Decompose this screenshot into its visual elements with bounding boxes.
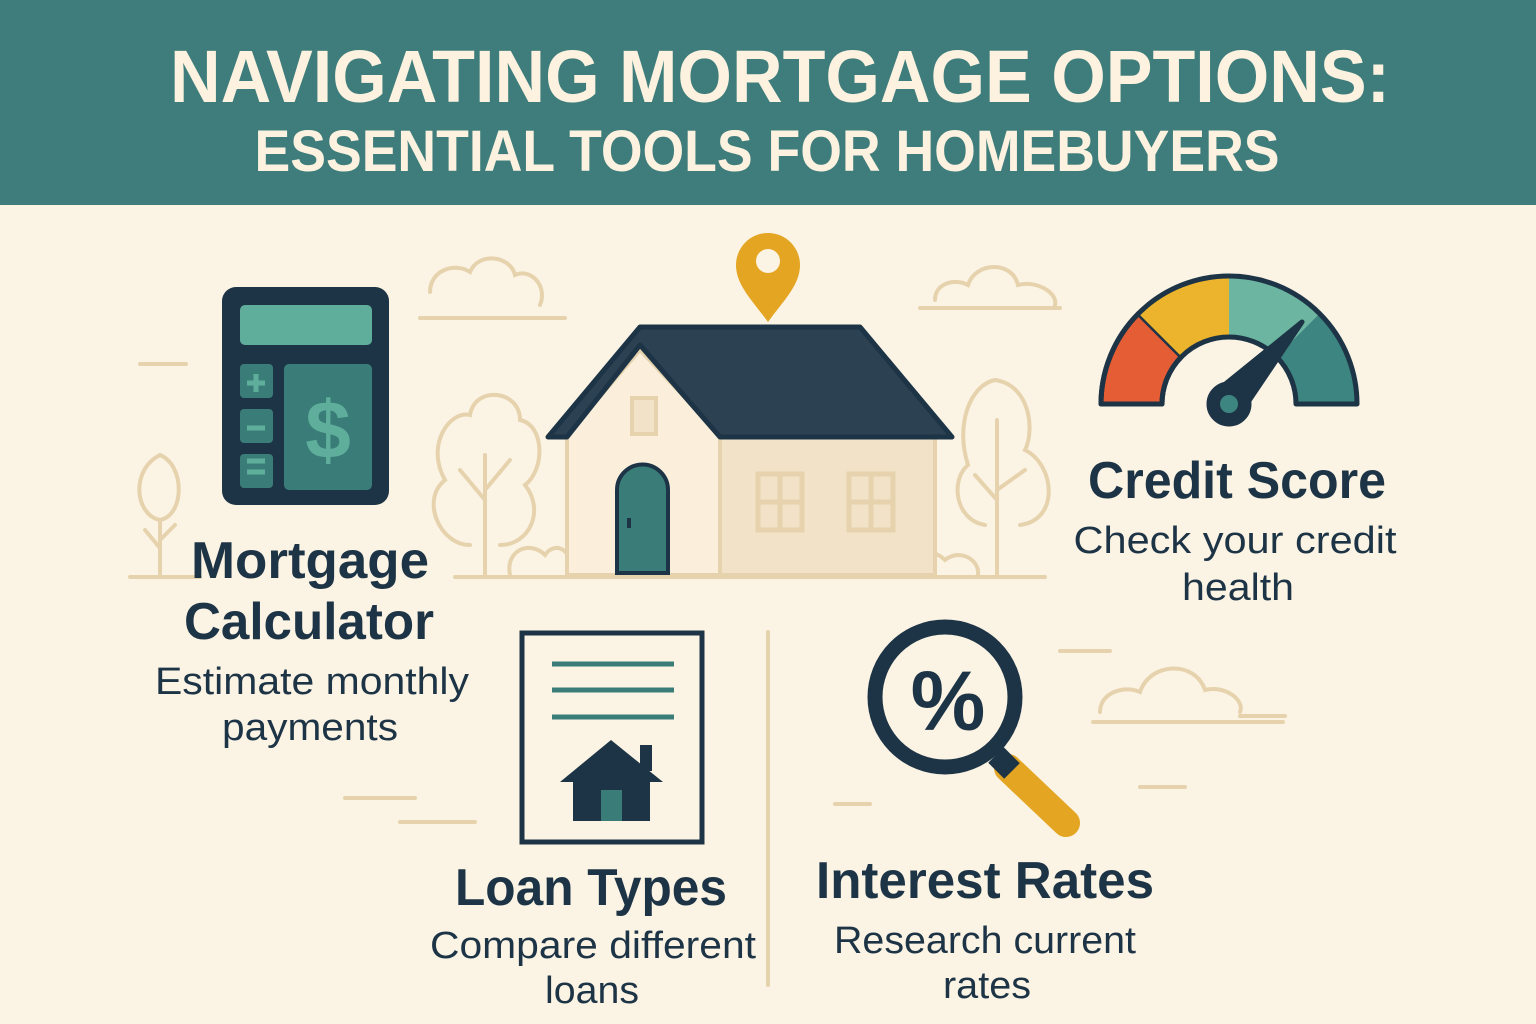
text: mortgage calculator: payments: [222, 707, 398, 749]
text: credit score: Credit Score: [1088, 452, 1386, 510]
text: mortgage calculator: Estimate monthly: [155, 661, 469, 703]
icon: credit gauge: [1101, 276, 1357, 424]
text: loan types: Compare different: [430, 925, 756, 967]
text: interest rates: [816, 852, 1154, 1007]
text: interest rates: Interest Rates: [816, 852, 1154, 910]
icon: location pin: [736, 233, 800, 322]
icon: calculator: [222, 287, 389, 505]
icon: magnifier with percent: [875, 627, 1066, 823]
header banner: [0, 0, 1536, 205]
text: credit score: [1074, 452, 1397, 609]
text: loan types: Loan Types: [455, 859, 727, 917]
icon: magnifier with percent: %: [911, 654, 985, 748]
text: credit score: health: [1182, 567, 1294, 609]
text: loan types: [430, 859, 756, 1012]
text: credit score: Check your credit: [1074, 520, 1397, 562]
icon: loan document: [522, 633, 702, 842]
icon: house: [548, 327, 952, 575]
icon: calculator: $: [305, 385, 351, 476]
text: mortgage calculator: [155, 532, 469, 749]
text: mortgage calculator: Mortgage: [191, 532, 429, 590]
text: loan types: loans: [545, 970, 639, 1012]
text: mortgage calculator: Calculator: [184, 593, 434, 651]
subtitle: ESSENTIAL TOOLS FOR HOMEBUYERS: [254, 119, 1280, 184]
title: NAVIGATING MORTGAGE OPTIONS:: [170, 35, 1390, 118]
text: interest rates: Research current: [834, 920, 1136, 962]
text: interest rates: rates: [943, 965, 1031, 1007]
